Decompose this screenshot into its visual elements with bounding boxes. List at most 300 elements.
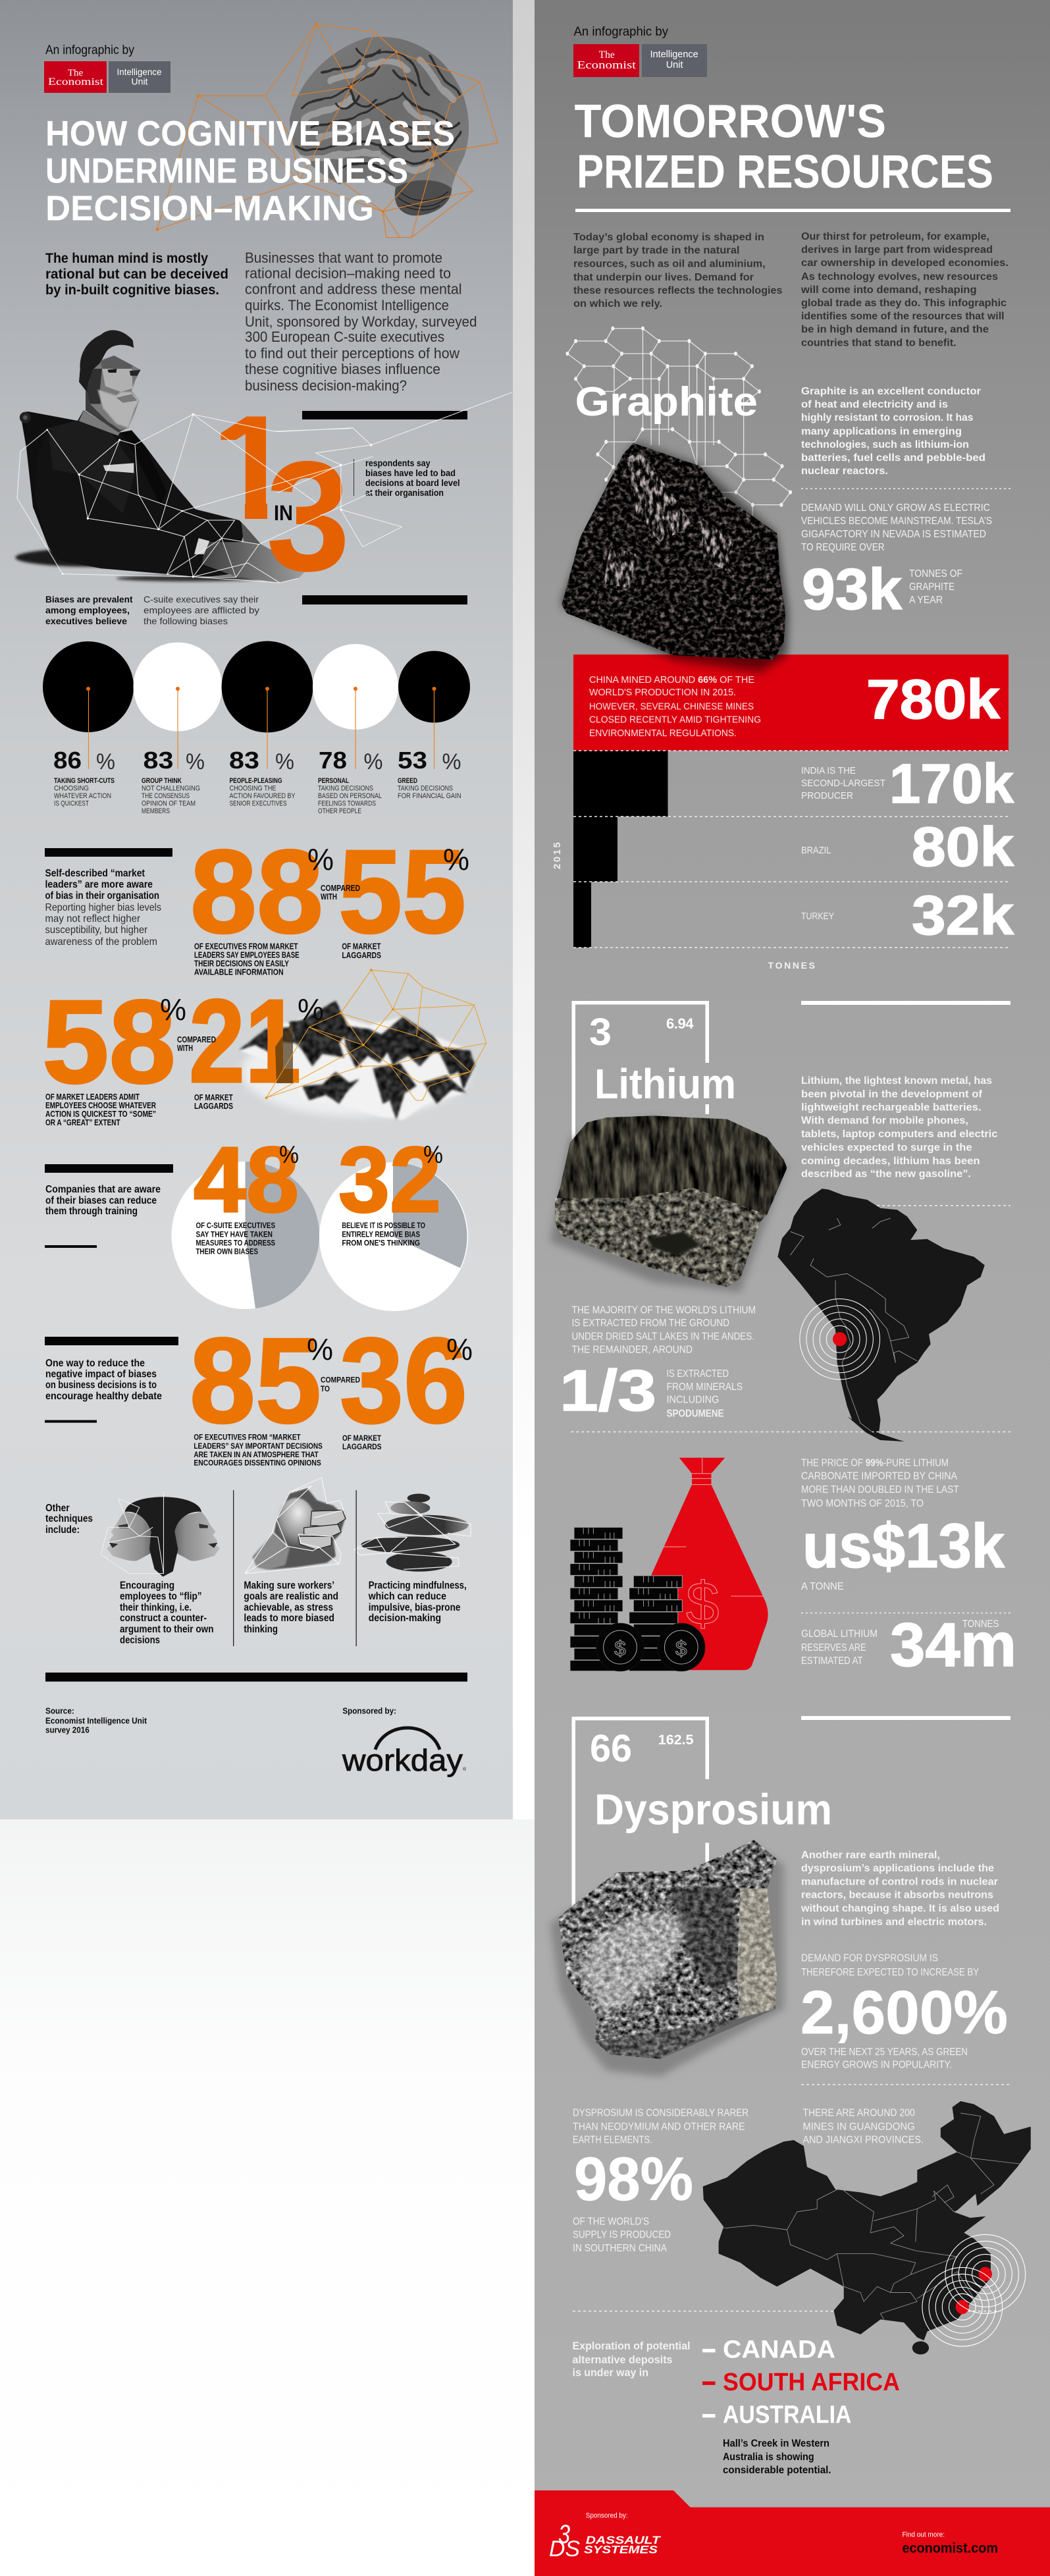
text: training reduces bias: Companies that are aware: [45, 1184, 161, 1195]
statistic: 88% vs 55%: WITH: [321, 892, 337, 901]
statistic: 58% vs 21%: WITH: [177, 1044, 193, 1053]
sponsor: workday: [342, 1706, 467, 1777]
statistic: 88% vs 55%: [190, 826, 469, 977]
footer banner: Sponsored by:: [586, 2511, 628, 2519]
illustration: dysprosium rock: [550, 1840, 783, 2077]
intro text right: car ownership in developed economies.: [801, 257, 1009, 269]
text: technique flip thinking: employees to “flip”: [120, 1591, 202, 1602]
statistic: 85% vs 36%: %: [446, 1332, 473, 1366]
publisher label: An infographic by: [574, 25, 668, 39]
intro body text: to find out their perceptions of how: [245, 345, 459, 362]
statistic: 1/3 from minerals: INCLUDING: [666, 1395, 719, 1406]
intro text left: [573, 232, 783, 309]
label: taking short-cuts: TAKING SHORT-CUTS: [54, 777, 115, 785]
logo: The Economist Intelligence Unit: The: [68, 68, 83, 78]
statistic: 58% vs 21%: [42, 975, 324, 1127]
sponsor: workday: Sponsored by:: [342, 1706, 396, 1716]
statistic: 58% vs 21%: %: [160, 992, 186, 1027]
statistic: 88% vs 55%: COMPARED: [321, 884, 360, 893]
dysprosium demand text: DEMAND FOR DYSPROSIUM IS: [801, 1953, 938, 1964]
label: personal: TAKING DECISIONS: [318, 784, 373, 792]
element box: dysprosium: 162.5: [658, 1732, 694, 1748]
chart: pie 32%: 32: [338, 1127, 441, 1231]
intro body text: rational decision–making need to: [245, 265, 451, 282]
statistic: 88% vs 55%: 88: [190, 826, 323, 958]
logo: Dassault Systemes: SYSTEMES: [584, 2544, 658, 2556]
rarity text: DYSPROSIUM IS CONSIDERABLY RARER: [573, 2108, 748, 2119]
list: alternative deposit countries: AUSTRALIA: [723, 2402, 851, 2429]
statistic: 88% vs 55%: LAGGARDS: [342, 951, 381, 960]
illustration: lithium rock: [550, 1115, 787, 1292]
chart: graphite producers bars: 32k: [912, 884, 1014, 946]
chart: pie 32%: [319, 1127, 468, 1311]
graphite text: highly resistant to corrosion. It has: [801, 412, 973, 423]
logo: The Economist Intelligence Unit: Economist: [48, 76, 104, 88]
statistic: 88% vs 55%: OF MARKET: [342, 942, 381, 952]
logo: The Economist Intelligence Unit: [573, 44, 707, 77]
chart: graphite producers bars: 2015: [552, 842, 563, 869]
intro text left: large part by trade in the natural: [573, 245, 740, 256]
logo: Dassault Systemes: DS: [549, 2536, 580, 2562]
statistic: 93k tonnes: [802, 556, 962, 622]
statistic: 1 in 3 respondents: biases have led to bad: [365, 468, 456, 478]
text: healthy debate: [45, 1337, 178, 1423]
intro text right: identifies some of the resources that will: [801, 311, 1005, 322]
title: [45, 114, 455, 228]
sponsor: workday: workday: [342, 1743, 463, 1777]
text: technique mindfulness: [368, 1580, 467, 1624]
Hall's Creek note: Australia is showing: [723, 2452, 814, 2463]
intro body text: these cognitive biases influence: [245, 361, 440, 377]
lithium extraction text: THE REMAINDER, AROUND: [571, 1345, 693, 1356]
logo: The Economist Intelligence Unit: Unit: [666, 60, 683, 70]
text: technique flip thinking: their thinking, i.e.: [120, 1602, 192, 1613]
intro text right: will come into demand, reshaping: [801, 284, 977, 296]
map: South America: [777, 1189, 985, 1441]
heading: other techniques: Other: [45, 1503, 70, 1514]
statistic: 85% vs 36%: LEADERS” SAY IMPORTANT DECISIONS: [194, 1443, 323, 1451]
statistic: 93k tonnes: TONNES OF: [909, 568, 962, 579]
label: people-pleasing: SENIOR EXECUTIVES: [229, 800, 287, 808]
text: technique flip thinking: decisions: [120, 1634, 160, 1646]
text: technique mindfulness: decision-making: [369, 1613, 441, 1624]
text: healthy debate: encourage healthy debate: [45, 1391, 162, 1402]
graphite text: batteries, fuel cells and pebble-bed: [801, 452, 985, 464]
dysprosium growth text: [801, 2047, 968, 2071]
chart: bias prevalence circles: %: [96, 749, 115, 774]
graphite demand text: GIGAFACTORY IN NEVADA IS ESTIMATED: [801, 529, 986, 540]
rarity text: THAN NEODYMIUM AND OTHER RARE: [573, 2122, 745, 2132]
panel: tomorrow's prized resources: [535, 0, 1050, 2576]
statistic: 98% southern China: OF THE WORLD'S: [573, 2216, 649, 2227]
intro text right: As technology evolves, new resources: [801, 271, 998, 282]
statistic: 88% vs 55%: OF EXECUTIVES FROM MARKET: [194, 942, 298, 952]
chart: bias prevalence circles: %: [275, 749, 294, 774]
chart: graphite producers bars: 80k: [912, 816, 1014, 878]
rarity text: EARTH ELEMENTS.: [573, 2135, 652, 2145]
intro body text: confront and address these mental: [245, 281, 462, 298]
lithium text: [801, 1075, 998, 1180]
statistic: 1 in 3 respondents: IN: [274, 501, 293, 525]
dysprosium growth text: OVER THE NEXT 25 YEARS, AS GREEN: [801, 2047, 968, 2058]
graphite demand text: [801, 502, 992, 553]
lithium price text: THE PRICE OF 99%-PURE LITHIUM: [801, 1458, 949, 1468]
re-draw map tip over dashed line: [847, 1416, 904, 1441]
graphite text: Graphite is an excellent conductor: [801, 386, 981, 397]
icon: red money bag with coins: $: [675, 1636, 687, 1660]
statistic: 88% vs 55%: %: [307, 842, 334, 876]
intro text right: [801, 231, 1009, 349]
statistic: 85% vs 36%: ENCOURAGES DISSENTING OPINIONS: [194, 1460, 321, 1468]
statistic: 58% vs 21%: COMPARED: [177, 1035, 216, 1044]
text: market leaders awareness: leaders” are more aware: [45, 879, 153, 890]
dysprosium text: reactors, because it absorbs neutrons: [801, 1890, 993, 1901]
statistic: 34m tonnes reserves: [801, 1610, 1016, 1679]
dysprosium text: dysprosium’s applications include the: [801, 1863, 994, 1874]
text: healthy debate: negative impact of biases: [45, 1369, 157, 1380]
label: greed: GREED: [398, 777, 417, 785]
statistic: US$13k a tonne: A TONNE: [801, 1581, 844, 1592]
icon: brain illustration: [290, 37, 469, 215]
statistic: 85% vs 36%: ARE TAKEN IN AN ATMOSPHERE THAT: [194, 1451, 319, 1459]
source note: Economist Intelligence Unit: [45, 1715, 147, 1725]
lithium text: With demand for mobile phones,: [801, 1115, 968, 1127]
title: TOMORROW'S: [574, 96, 886, 148]
dysprosium text: without changing shape. It is also used: [801, 1903, 999, 1914]
illustration: graphite rock: [560, 443, 789, 672]
intro text left: Today’s global economy is shaped in: [573, 232, 764, 243]
lithium text: described as “the new gasoline”.: [801, 1169, 971, 1180]
element box: lithium: 3: [589, 1011, 612, 1054]
intro text right: global trade as they do. This infographic: [801, 298, 1007, 309]
dysprosium text: manufacture of control rods in nuclear: [801, 1877, 998, 1887]
chart: pie 48%: MEASURES TO ADDRESS: [196, 1239, 275, 1247]
chart: bias prevalence circles: %: [186, 749, 205, 774]
icon: red money bag with coins: $: [686, 1570, 720, 1637]
statistic: 1 in 3 respondents: at their organisation: [365, 488, 444, 498]
footer banner: [535, 2490, 1050, 2576]
statistic: 58% vs 21%: ACTION IS QUICKEST TO “SOME”: [45, 1110, 156, 1119]
chart: pie 48%: %: [279, 1141, 299, 1168]
statistic: 1/3 from minerals: 1/3: [560, 1358, 656, 1423]
logo: The Economist Intelligence Unit: The: [599, 49, 615, 61]
label: personal: OTHER PEOPLE: [318, 807, 361, 815]
statistic: 1/3 from minerals: FROM MINERALS: [666, 1382, 743, 1393]
chart: graphite producers bars: SECOND-LARGEST: [801, 778, 885, 789]
chart: bias prevalence circles: 78: [319, 747, 347, 774]
label: personal: PERSONAL: [318, 777, 349, 785]
mines text: AND JIANGXI PROVINCES.: [802, 2135, 924, 2145]
graphite demand text: VEHICLES BECOME MAINSTREAM. TESLA’S: [801, 516, 992, 527]
icon: graphene hex network: [565, 327, 792, 521]
red production box: WORLD'S PRODUCTION IN 2015.: [589, 687, 736, 698]
text: technique realistic goals: thinking: [244, 1624, 278, 1635]
statistic: 58% vs 21%: EMPLOYEES CHOOSE WHATEVER: [45, 1101, 156, 1110]
statistic: 58% vs 21%: 58: [42, 976, 176, 1108]
text: training reduces bias: of their biases can reduce: [45, 1195, 157, 1206]
exploration text: is under way in: [573, 2367, 648, 2379]
publisher label: An infographic by: [45, 43, 134, 57]
text: biases prevalent among employees: among employees,: [45, 604, 130, 615]
lithium extraction text: UNDER DRIED SALT LAKES IN THE ANDES.: [571, 1331, 754, 1343]
statistic: 34m tonnes reserves: RESERVES ARE: [801, 1642, 866, 1653]
text: technique flip thinking: construct a counter-: [120, 1613, 207, 1624]
text: training reduces bias: them through training: [45, 1206, 138, 1217]
intro text left: that underpin our lives. Demand for: [573, 272, 754, 283]
statistic: 98% southern China: SUPPLY IS PRODUCED: [573, 2230, 671, 2240]
statistic: 85% vs 36%: COMPARED: [321, 1377, 360, 1385]
chart: graphite producers bars: TONNES: [768, 960, 815, 971]
red production box: CHINA MINED AROUND 66% OF THE: [589, 675, 754, 685]
label: taking short-cuts: CHOOSING: [54, 784, 89, 792]
element box: lithium: 6.94: [666, 1015, 694, 1032]
label: personal: [318, 777, 382, 815]
icon: white network over executive: [17, 414, 373, 583]
statistic: 93k tonnes: A YEAR: [909, 595, 943, 606]
text: technique flip thinking: argument to their own: [120, 1624, 213, 1635]
mines text: THERE ARE AROUND 200: [802, 2108, 915, 2119]
statistic: 85% vs 36%: %: [307, 1332, 333, 1366]
illustration: snowy mountain: [238, 1000, 475, 1120]
source note: survey 2016: [45, 1725, 90, 1734]
intro body text: quirks. The Economist Intelligence: [245, 297, 449, 313]
label: people-pleasing: PEOPLE-PLEASING: [229, 777, 282, 785]
intro lead text: by in-built cognitive biases.: [45, 282, 219, 298]
chart: graphite producers bars: 170k: [889, 753, 1014, 815]
title: PRIZED RESOURCES: [577, 146, 993, 198]
text: biases prevalent among employees: executives believe: [45, 616, 127, 626]
illustration: hand gripping stress ball: [245, 1478, 346, 1574]
chart: pie 48%: 48: [194, 1127, 299, 1231]
red production box: 780k: [866, 668, 1000, 730]
map: China: [703, 2101, 1031, 2355]
text: market leaders awareness: may not reflect higher: [45, 913, 141, 925]
chart: pie 32%: ENTIRELY REMOVE BIAS: [342, 1231, 420, 1239]
statistic: 85% vs 36%: 36: [340, 1312, 467, 1448]
label: people-pleasing: CHOOSING THE: [229, 784, 276, 792]
text: market leaders awareness: susceptibility, but higher: [45, 925, 148, 936]
text: training reduces bias: [45, 1164, 173, 1248]
text: healthy debate: One way to reduce the: [45, 1358, 145, 1369]
exploration text: alternative deposits: [573, 2354, 673, 2366]
title: UNDERMINE BUSINESS: [45, 151, 408, 191]
text: technique flip thinking: Encouraging: [120, 1580, 174, 1591]
statistic: 58% vs 21%: 21: [189, 975, 301, 1108]
text: biases prevalent among employees: the following biases: [144, 616, 228, 626]
heading: graphite: Graphite: [575, 379, 758, 425]
statistic: 98% southern China: 98%: [574, 2145, 693, 2213]
lithium text: lightweight rechargeable batteries.: [801, 1102, 982, 1114]
element box: lithium: [571, 1001, 736, 1139]
chart: bias prevalence circles: 86: [53, 747, 82, 774]
label: personal: FEELINGS TOWARDS: [318, 800, 376, 808]
statistic: 58% vs 21%: OF MARKET: [194, 1093, 233, 1102]
statistic: 85% vs 36%: 85: [190, 1312, 321, 1448]
intro text left: on which we rely.: [573, 298, 662, 309]
chart: pie 32%: %: [423, 1141, 443, 1168]
mines text: MINES IN GUANGDONG: [802, 2122, 915, 2132]
statistic: 1/3 from minerals: SPODUMENE: [666, 1408, 724, 1420]
text: market leaders awareness: of bias in their organisation: [45, 890, 159, 901]
intro body text: Unit, sponsored by Workday, surveyed: [245, 313, 477, 330]
logo: Dassault Systemes: DASSAULT: [586, 2534, 662, 2546]
statistic: 85% vs 36%: OF EXECUTIVES FROM “MARKET: [194, 1434, 301, 1442]
text: technique mindfulness: Practicing mindfulness,: [369, 1580, 467, 1591]
statistic: 85% vs 36%: [190, 1312, 473, 1468]
label: taking short-cuts: [54, 777, 115, 808]
graphite text: nuclear reactors.: [801, 466, 888, 477]
label: personal: BASED ON PERSONAL: [318, 792, 382, 800]
footer banner: economist.com: [902, 2541, 998, 2556]
graphite text: [801, 386, 985, 477]
dysprosium growth text: ENERGY GROWS IN POPULARITY.: [801, 2060, 952, 2071]
statistic: 88% vs 55%: %: [443, 842, 469, 876]
statistic: 58% vs 21%: OF MARKET LEADERS ADMIT: [45, 1092, 140, 1102]
red production box: CLOSED RECENTLY AMID TIGHTENING: [589, 715, 761, 726]
red production box: ENVIRONMENTAL REGULATIONS.: [589, 728, 737, 739]
chart: graphite producers bars: TURKEY: [801, 911, 834, 922]
graphite text: of heat and electricity and is: [801, 399, 948, 410]
chart: bias prevalence circles: 83: [229, 747, 259, 774]
dysprosium demand text: [801, 1953, 979, 1978]
text: market leaders awareness: [45, 848, 172, 948]
icon: orange network over brain: [156, 22, 498, 238]
exploration text: [573, 2340, 690, 2379]
statistic: 88% vs 55%: THEIR DECISIONS ON EASILY: [194, 959, 290, 969]
statistic: 98% southern China: IN SOUTHERN CHINA: [573, 2243, 667, 2254]
heading: other techniques: techniques: [45, 1513, 93, 1524]
text: technique flip thinking: [120, 1580, 213, 1646]
label: greed: TAKING DECISIONS: [398, 784, 453, 792]
heading: other techniques: include:: [45, 1524, 80, 1536]
text: technique realistic goals: goals are realistic and: [244, 1591, 338, 1602]
statistic: 1/3 from minerals: IS EXTRACTED: [666, 1368, 729, 1380]
lithium extraction text: [571, 1304, 756, 1356]
text: technique mindfulness: impulsive, bias-prone: [369, 1602, 461, 1613]
intro lead text: rational but can be deceived: [45, 267, 228, 282]
sponsor: workday: ®: [463, 1767, 467, 1772]
white network at right of statistic: [275, 392, 512, 547]
statistic: 34m tonnes reserves: TONNES: [962, 1619, 999, 1630]
lithium extraction text: THE MAJORITY OF THE WORLD'S LITHIUM: [571, 1304, 756, 1316]
lithium price text: [801, 1458, 959, 1509]
text: biases prevalent among employees: employees are afflicted by: [144, 604, 259, 615]
title: [574, 96, 993, 198]
footer banner: Find out more:: [902, 2531, 945, 2539]
chart: bias prevalence circles: [43, 641, 470, 815]
chart: graphite producers bars: INDIA IS THE: [801, 766, 856, 776]
chart: graphite producers bars: BRAZIL: [801, 845, 831, 856]
label: group think: [142, 777, 200, 815]
chart: graphite producers bars: [552, 751, 1014, 971]
intro text right: be in high demand in future, and the: [801, 324, 989, 335]
element box: dysprosium: [571, 1717, 832, 1908]
text: biases prevalent among employees: C-suite executives say their: [144, 594, 259, 604]
intro text left: resources, such as oil and aluminium,: [573, 259, 766, 270]
text: market leaders awareness: Reporting higher bias levels: [45, 902, 161, 913]
text: technique realistic goals: leads to more biased: [244, 1613, 334, 1624]
statistic: 93k tonnes: GRAPHITE: [909, 581, 955, 593]
graphite text: technologies, such as lithium-ion: [801, 439, 969, 450]
lithium text: coming decades, lithium has been: [801, 1156, 980, 1167]
statistic: 1 in 3 respondents: [221, 411, 467, 572]
statistic: 34m tonnes reserves: ESTIMATED AT: [801, 1655, 863, 1667]
text: technique realistic goals: [244, 1580, 338, 1635]
label: greed: FOR FINANCIAL GAIN: [398, 792, 461, 800]
lithium text: been pivotal in the development of: [801, 1089, 983, 1100]
intro body text: business decision-making?: [245, 377, 407, 394]
Hall's Creek note: considerable potential.: [723, 2465, 831, 2476]
statistic: 98% southern China: [573, 2145, 693, 2254]
graphite text: many applications in emerging: [801, 426, 962, 437]
Hall's Creek note: [723, 2438, 831, 2476]
intro text right: countries that stand to benefit.: [801, 337, 957, 349]
dysprosium demand text: THEREFORE EXPECTED TO INCREASE BY: [801, 1967, 979, 1978]
dysprosium text: Another rare earth mineral,: [801, 1850, 940, 1861]
logo: The Economist Intelligence Unit: [44, 61, 171, 93]
logo: The Economist Intelligence Unit: Intelligence: [650, 49, 698, 60]
divider lines between techniques: [233, 1490, 357, 1646]
label: taking short-cuts: IS QUICKEST: [54, 800, 89, 808]
illustration: balanced stones: [354, 1493, 471, 1572]
logo: The Economist Intelligence Unit: Intelligence: [117, 67, 162, 77]
lithium price text: CARBONATE IMPORTED BY CHINA: [801, 1470, 957, 1482]
statistic: 58% vs 21%: OR A “GREAT” EXTENT: [45, 1118, 120, 1127]
label: taking short-cuts: WHATEVER ACTION: [54, 792, 111, 800]
text: technique mindfulness: which can reduce: [368, 1591, 446, 1602]
statistic: 88% vs 55%: AVAILABLE INFORMATION: [194, 968, 284, 977]
lithium text: vehicles expected to surge in the: [801, 1142, 972, 1154]
source note: [45, 1706, 147, 1734]
statistic: 34m tonnes reserves: 34m: [890, 1610, 1016, 1679]
statistic: 1/3 from minerals: [560, 1358, 743, 1423]
dysprosium text: [801, 1850, 999, 1928]
label: greed: [398, 777, 461, 800]
map markers: Guangdong and Jiangxi: [922, 2234, 1026, 2346]
lithium price text: MORE THAN DOUBLED IN THE LAST: [801, 1484, 959, 1495]
title: DECISION–MAKING: [45, 188, 374, 228]
label: people-pleasing: [229, 777, 296, 808]
statistic: US$13k a tonne: us$13k: [802, 1511, 1005, 1581]
graphite demand text: DEMAND WILL ONLY GROW AS ELECTRIC: [801, 502, 990, 514]
statistic: 85% vs 36%: OF MARKET: [342, 1435, 381, 1443]
graphite demand text: TO REQUIRE OVER: [801, 542, 885, 553]
logo: The Economist Intelligence Unit: Economist: [577, 59, 637, 71]
label: group think: MEMBERS: [142, 807, 170, 815]
source note: Source:: [45, 1706, 74, 1716]
text: biases prevalent among employees: [45, 594, 259, 626]
statistic: 88% vs 55%: 55: [338, 826, 466, 958]
chart: pie 48%: SAY THEY HAVE TAKEN: [196, 1231, 273, 1239]
statistic: 1 in 3 respondents: 3: [266, 429, 350, 604]
statistic: 58% vs 21%: %: [298, 992, 324, 1027]
intro lead text: [45, 251, 228, 298]
statistic: 93k tonnes: 93k: [802, 556, 903, 622]
statistic: 34m tonnes reserves: GLOBAL LITHIUM: [801, 1628, 878, 1640]
chart: pie 48%: THEIR OWN BIASES: [196, 1248, 258, 1256]
lithium price text: TWO MONTHS OF 2015, TO: [801, 1498, 924, 1509]
red production box: HOWEVER, SEVERAL CHINESE MINES: [589, 702, 754, 712]
logo: Dassault Systemes: [549, 2520, 662, 2562]
panel: cognitive biases: [0, 0, 513, 1819]
intro lead text: The human mind is mostly: [45, 251, 208, 266]
text: technique realistic goals: achievable, as stress: [244, 1602, 333, 1613]
label: people-pleasing: ACTION FAVOURED BY: [229, 792, 296, 800]
red production box: [573, 655, 1009, 751]
statistic: 2,600%: 2,600%: [801, 1978, 1008, 2047]
text: technique realistic goals: Making sure workers’: [244, 1580, 334, 1591]
statistic: 1 in 3 respondents: respondents say: [365, 458, 431, 468]
